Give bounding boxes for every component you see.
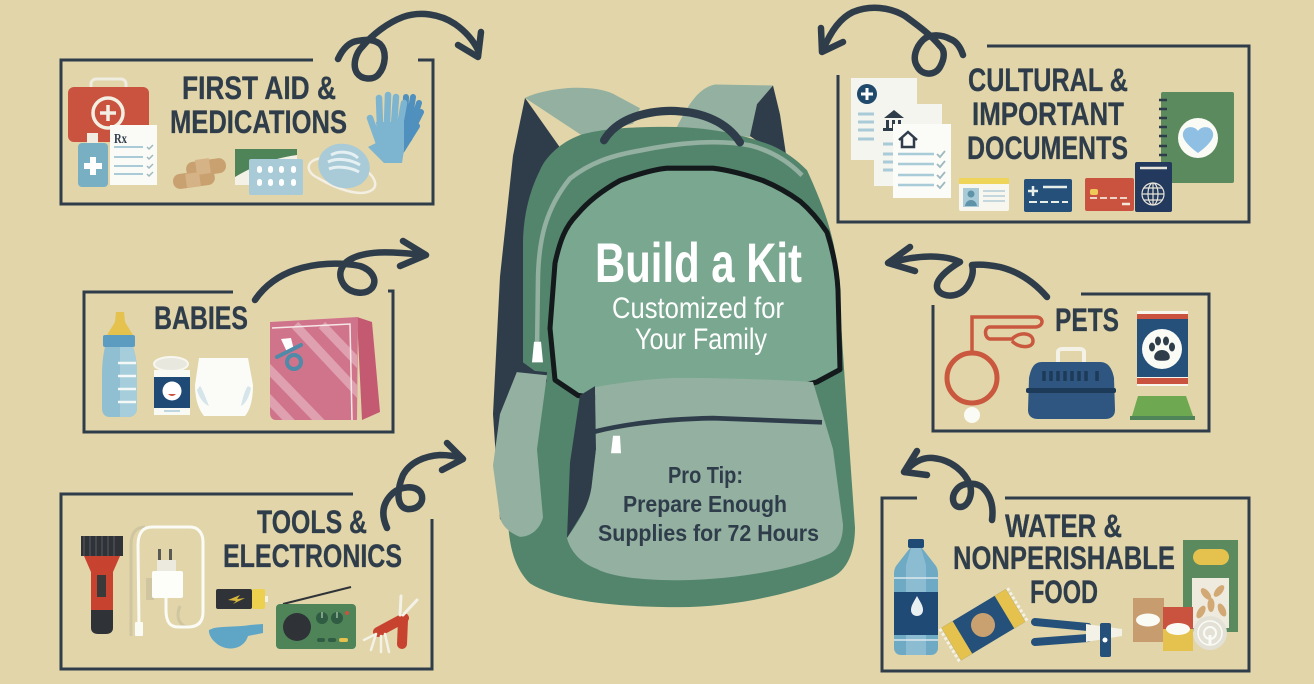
panel: first aid and medications bbox=[61, 14, 481, 204]
icon: multitool bbox=[364, 596, 417, 652]
icon: prescription: Rx bbox=[114, 132, 127, 147]
right strap dark side bbox=[750, 86, 787, 161]
dark pocket side bbox=[567, 386, 596, 538]
icon: pet food bag bbox=[1137, 311, 1188, 386]
arrow bbox=[904, 451, 993, 520]
frame bbox=[933, 294, 1209, 431]
icon: whistle bbox=[209, 624, 263, 648]
icon: diaper bbox=[195, 358, 253, 416]
icon: bandages bbox=[172, 157, 227, 190]
icon: water bottle bbox=[894, 539, 938, 655]
pro tip: Supplies for 72 Hours bbox=[598, 520, 819, 546]
backpack bbox=[493, 84, 855, 607]
icon: baby bottle bbox=[102, 312, 137, 417]
icon: first aid kit bbox=[68, 79, 149, 142]
heading bbox=[170, 70, 347, 140]
subtitle bbox=[612, 292, 784, 356]
panel: water and nonperishable food bbox=[882, 451, 1249, 671]
zipper arc bbox=[537, 142, 802, 352]
heading bbox=[223, 504, 402, 574]
icon: pill pack bbox=[235, 149, 303, 195]
arrow bbox=[338, 14, 481, 79]
front panel with black zipper bbox=[550, 168, 840, 411]
icon: can lid bbox=[1193, 616, 1227, 650]
arrow bbox=[255, 241, 426, 300]
icon: battery bbox=[216, 589, 268, 609]
frame bbox=[61, 60, 433, 204]
heading: FIRST AID & bbox=[182, 70, 336, 106]
heading: CULTURAL & bbox=[968, 62, 1128, 98]
icon: tan can bbox=[1133, 598, 1164, 642]
right strap bbox=[677, 84, 773, 137]
heading: MEDICATIONS bbox=[170, 104, 347, 140]
heading: WATER & bbox=[1005, 508, 1122, 544]
heading: NONPERISHABLE bbox=[953, 540, 1175, 576]
icon: passport bbox=[1135, 162, 1172, 212]
frame bbox=[61, 494, 432, 669]
icon: radio bbox=[276, 587, 356, 649]
icon: pet bowl bbox=[1130, 396, 1195, 420]
handle bbox=[604, 111, 740, 142]
pro tip: Pro Tip: bbox=[668, 462, 743, 488]
heading: PETS bbox=[1055, 302, 1119, 338]
icon: document one bbox=[851, 78, 917, 160]
icon: notebook bbox=[1159, 92, 1234, 183]
arrow bbox=[888, 247, 1047, 297]
panel: pets bbox=[888, 247, 1209, 431]
pro tip bbox=[598, 462, 819, 546]
heading: DOCUMENTS bbox=[967, 130, 1128, 166]
arrow bbox=[821, 8, 963, 74]
icon: medicine bottle bbox=[78, 133, 108, 187]
heading bbox=[967, 62, 1128, 166]
frame bbox=[84, 291, 393, 432]
subtitle: Your Family bbox=[635, 323, 767, 356]
heading: FOOD bbox=[1030, 574, 1098, 610]
icon: blanket and pacifier bbox=[270, 317, 380, 420]
icon: face mask bbox=[309, 138, 375, 194]
title: build a kit: Build a Kit bbox=[595, 231, 802, 294]
heading: IMPORTANT bbox=[972, 96, 1124, 132]
icon: gloves bbox=[368, 95, 421, 163]
side pocket bbox=[493, 372, 547, 537]
zipper tag bbox=[532, 342, 543, 362]
backpack body bbox=[508, 127, 855, 607]
backpack rear dark panel bbox=[493, 98, 600, 519]
icon: can opener bbox=[1035, 622, 1122, 657]
icon: flashlight bbox=[81, 536, 123, 634]
frame bbox=[882, 498, 1249, 671]
heading: ELECTRONICS bbox=[223, 538, 402, 574]
frame bbox=[838, 46, 1249, 222]
icon: document two bbox=[874, 104, 942, 186]
pocket zipper bbox=[595, 418, 822, 432]
side pocket seam bbox=[517, 371, 547, 374]
icon: pet carrier bbox=[1026, 349, 1116, 419]
icon: leash and collar bbox=[947, 317, 1042, 403]
icon: baby food jar bbox=[154, 357, 190, 415]
icon: credit card bbox=[1085, 178, 1134, 211]
subtitle: Customized for bbox=[612, 292, 784, 325]
heading: TOOLS & bbox=[257, 504, 367, 540]
pro tip: Prepare Enough bbox=[623, 491, 787, 517]
icon: green box bbox=[1183, 540, 1238, 632]
icon: id card bbox=[959, 178, 1009, 211]
front pocket bbox=[567, 378, 843, 580]
icon: document three bbox=[893, 124, 951, 198]
panel: babies bbox=[84, 241, 426, 432]
arrow bbox=[383, 443, 463, 528]
icon: health card bbox=[1024, 179, 1072, 212]
backpack artwork bbox=[493, 84, 855, 607]
pocket zipper tag bbox=[611, 436, 621, 453]
panel: tools and electronics bbox=[61, 443, 463, 669]
icon: snack bar bbox=[940, 588, 1027, 661]
heading bbox=[953, 508, 1175, 610]
icon: charger and cable bbox=[131, 527, 203, 636]
left strap bbox=[525, 88, 640, 136]
icon: collar tag bbox=[964, 407, 980, 423]
icon: red and yellow can bbox=[1163, 607, 1193, 651]
panel: cultural and important documents bbox=[821, 8, 1249, 222]
heading: BABIES bbox=[154, 300, 248, 336]
icon: prescription bbox=[110, 125, 157, 185]
